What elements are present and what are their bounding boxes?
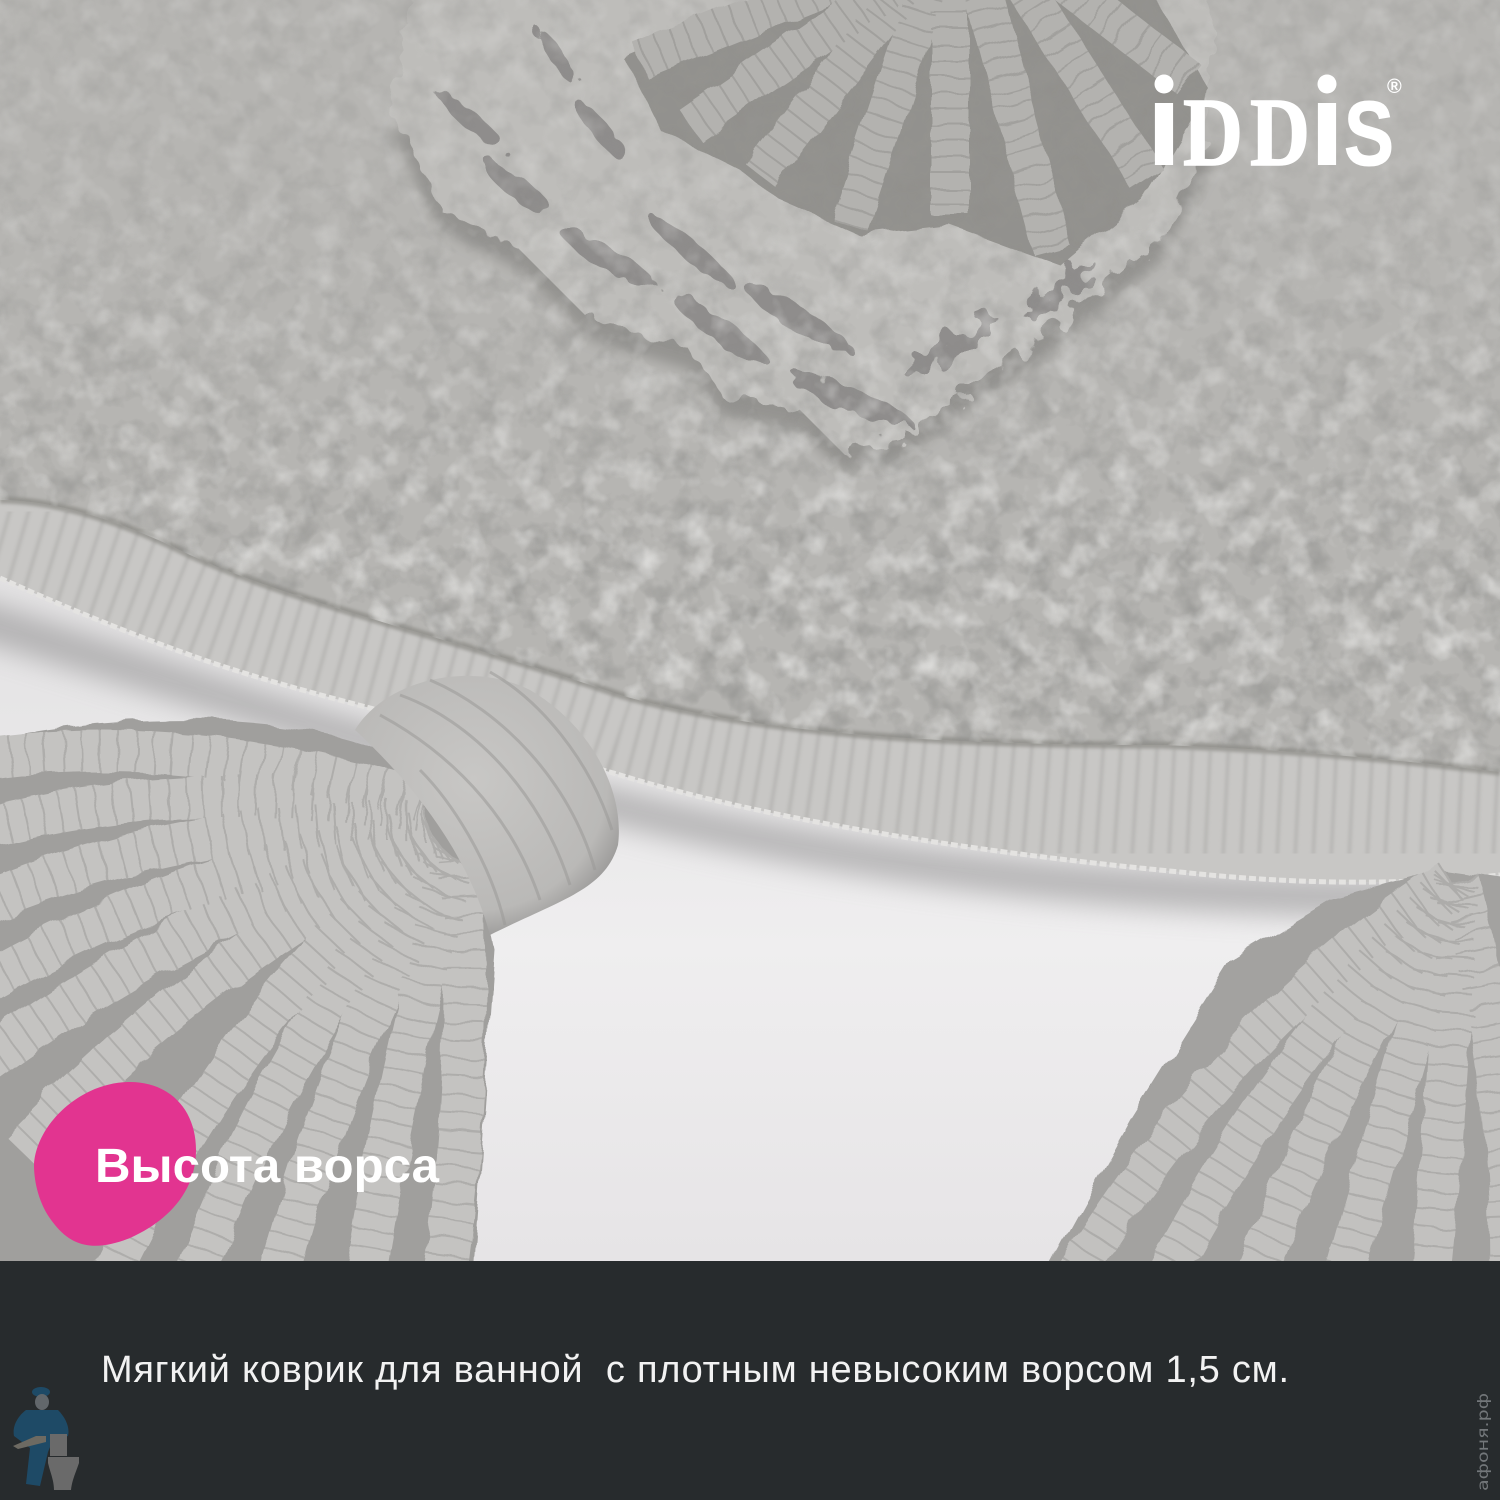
watermark: site name: афоня.рф <box>1474 1393 1492 1491</box>
left tassel knot <box>355 672 619 935</box>
description text: Мягкий коврик для ванной с плотным невысоким ворсом 1,5 см. <box>101 1349 1289 1391</box>
dark footer band <box>0 1261 1500 1500</box>
left tassel <box>0 720 495 1275</box>
top tassel strands <box>625 0 1210 265</box>
right tassel <box>1045 870 1500 1275</box>
heading: pile height: Высота ворса <box>95 1140 439 1193</box>
pink blob badge <box>34 1082 196 1246</box>
rug pile surface <box>0 0 1500 772</box>
brand logo: IDDIS: I <box>1310 85 1344 185</box>
shadow under rug <box>0 570 1500 917</box>
brand logo: IDDIS <box>1146 74 1402 187</box>
brand logo: IDDIS: S <box>1344 83 1394 185</box>
icon: plumber with toilet <box>13 1387 79 1490</box>
brand logo: IDDIS: D <box>1183 79 1243 187</box>
pile lumps texture <box>0 0 1500 800</box>
shadow cast by top tassel head <box>392 130 1220 470</box>
top tassel shag head <box>392 0 1210 450</box>
rug rope border <box>0 500 1500 882</box>
brand logo: IDDIS: ® <box>1387 76 1402 98</box>
brand logo: IDDIS: D <box>1250 79 1310 187</box>
brand logo: IDDIS: I <box>1146 85 1182 185</box>
